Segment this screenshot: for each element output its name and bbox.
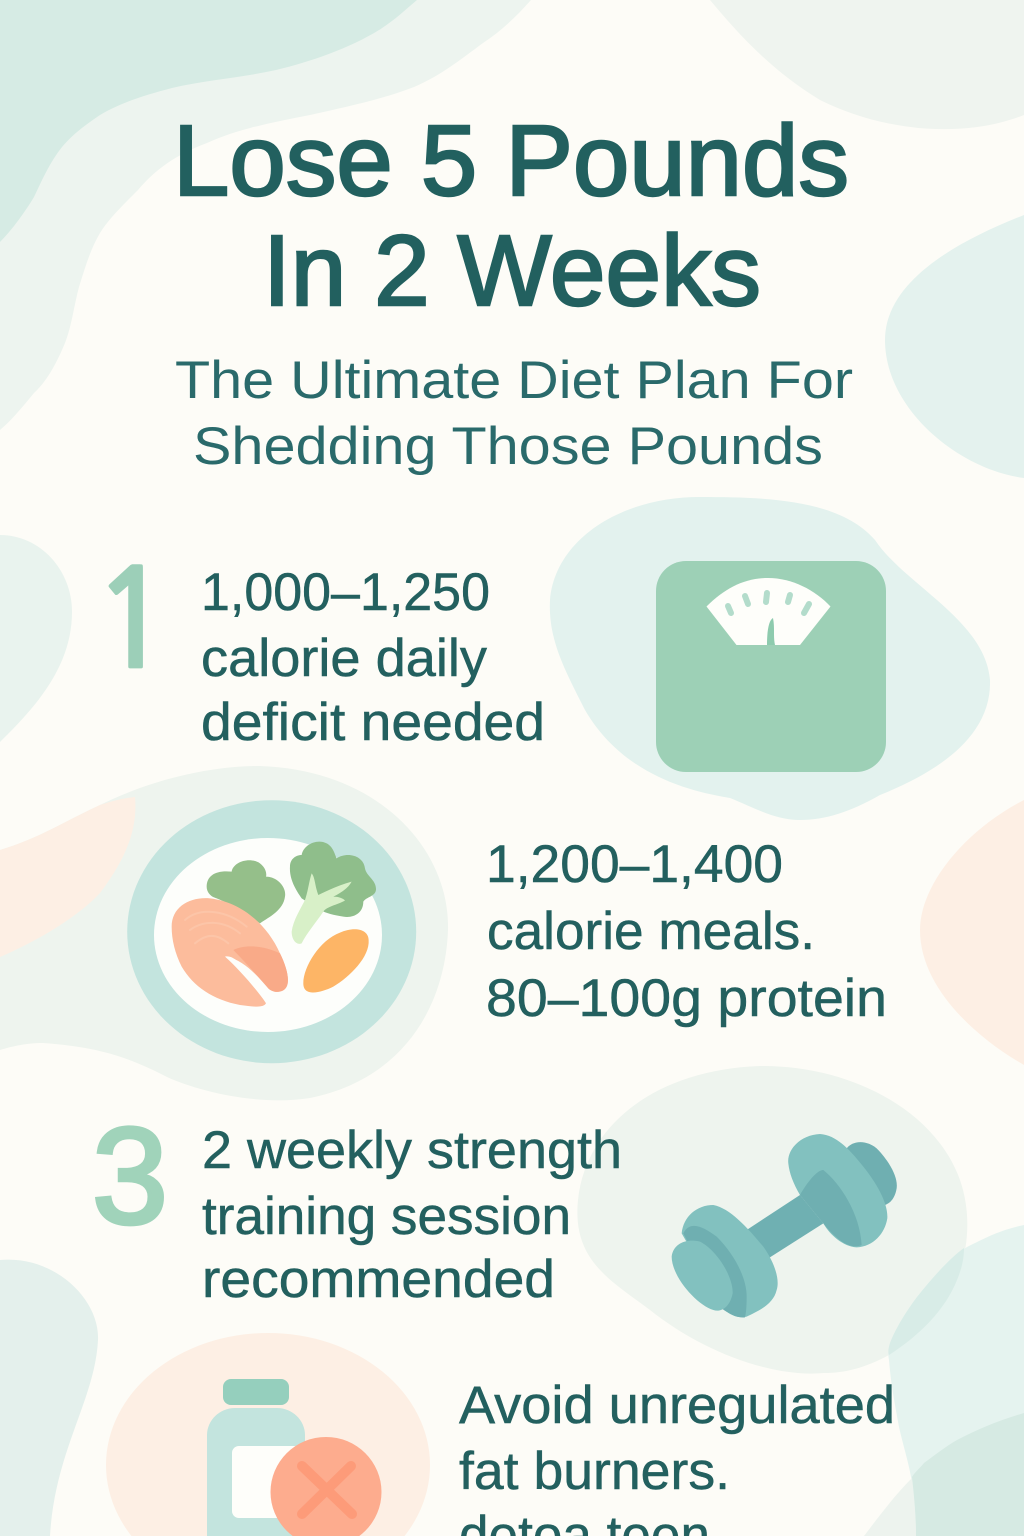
panel: step 1 calorie deficit: [91, 497, 990, 820]
title: In 2 Weeks: [263, 215, 761, 327]
icon: plate with salmon and greens: [0, 766, 448, 1100]
panel: step 3 strength training: [92, 1100, 897, 1317]
step 4 text: Avoid unregulated: [459, 1376, 895, 1435]
icon: dumbbell: [672, 1134, 897, 1317]
step 3 text: training session: [202, 1187, 571, 1246]
step 1 text: 1,000–1,250: [201, 563, 490, 622]
subtitle: The Ultimate Diet Plan For: [175, 351, 853, 410]
step 4 text: fat burners.: [459, 1442, 730, 1501]
step 1 number: 1: [91, 554, 174, 689]
step 1 text: [201, 563, 545, 752]
title: [173, 105, 849, 327]
panel: step 2 meals: [0, 766, 887, 1100]
step 2 text: 80–100g protein: [486, 969, 887, 1028]
step 1 text: deficit needed: [201, 693, 545, 752]
title: Lose 5 Pounds: [173, 105, 849, 217]
step 3 text: recommended: [202, 1250, 555, 1309]
step 2 text: 1,200–1,400: [486, 835, 783, 894]
step 2 text: calorie meals.: [487, 902, 815, 961]
step 1 text: calorie daily: [201, 629, 488, 688]
step 2 text: [486, 835, 887, 1028]
step 4 text: [459, 1376, 895, 1536]
icon: supplement bottle with cross: [106, 1333, 430, 1536]
subtitle: [175, 351, 853, 476]
step 3 text: 2 weekly strength: [202, 1121, 622, 1180]
icon: bathroom scale: [550, 497, 990, 820]
step 3 number: 3: [92, 1100, 168, 1253]
step 3 text: [202, 1121, 622, 1309]
panel: step 4 avoid fat burners: [106, 1333, 895, 1536]
subtitle: Shedding Those Pounds: [193, 417, 823, 476]
